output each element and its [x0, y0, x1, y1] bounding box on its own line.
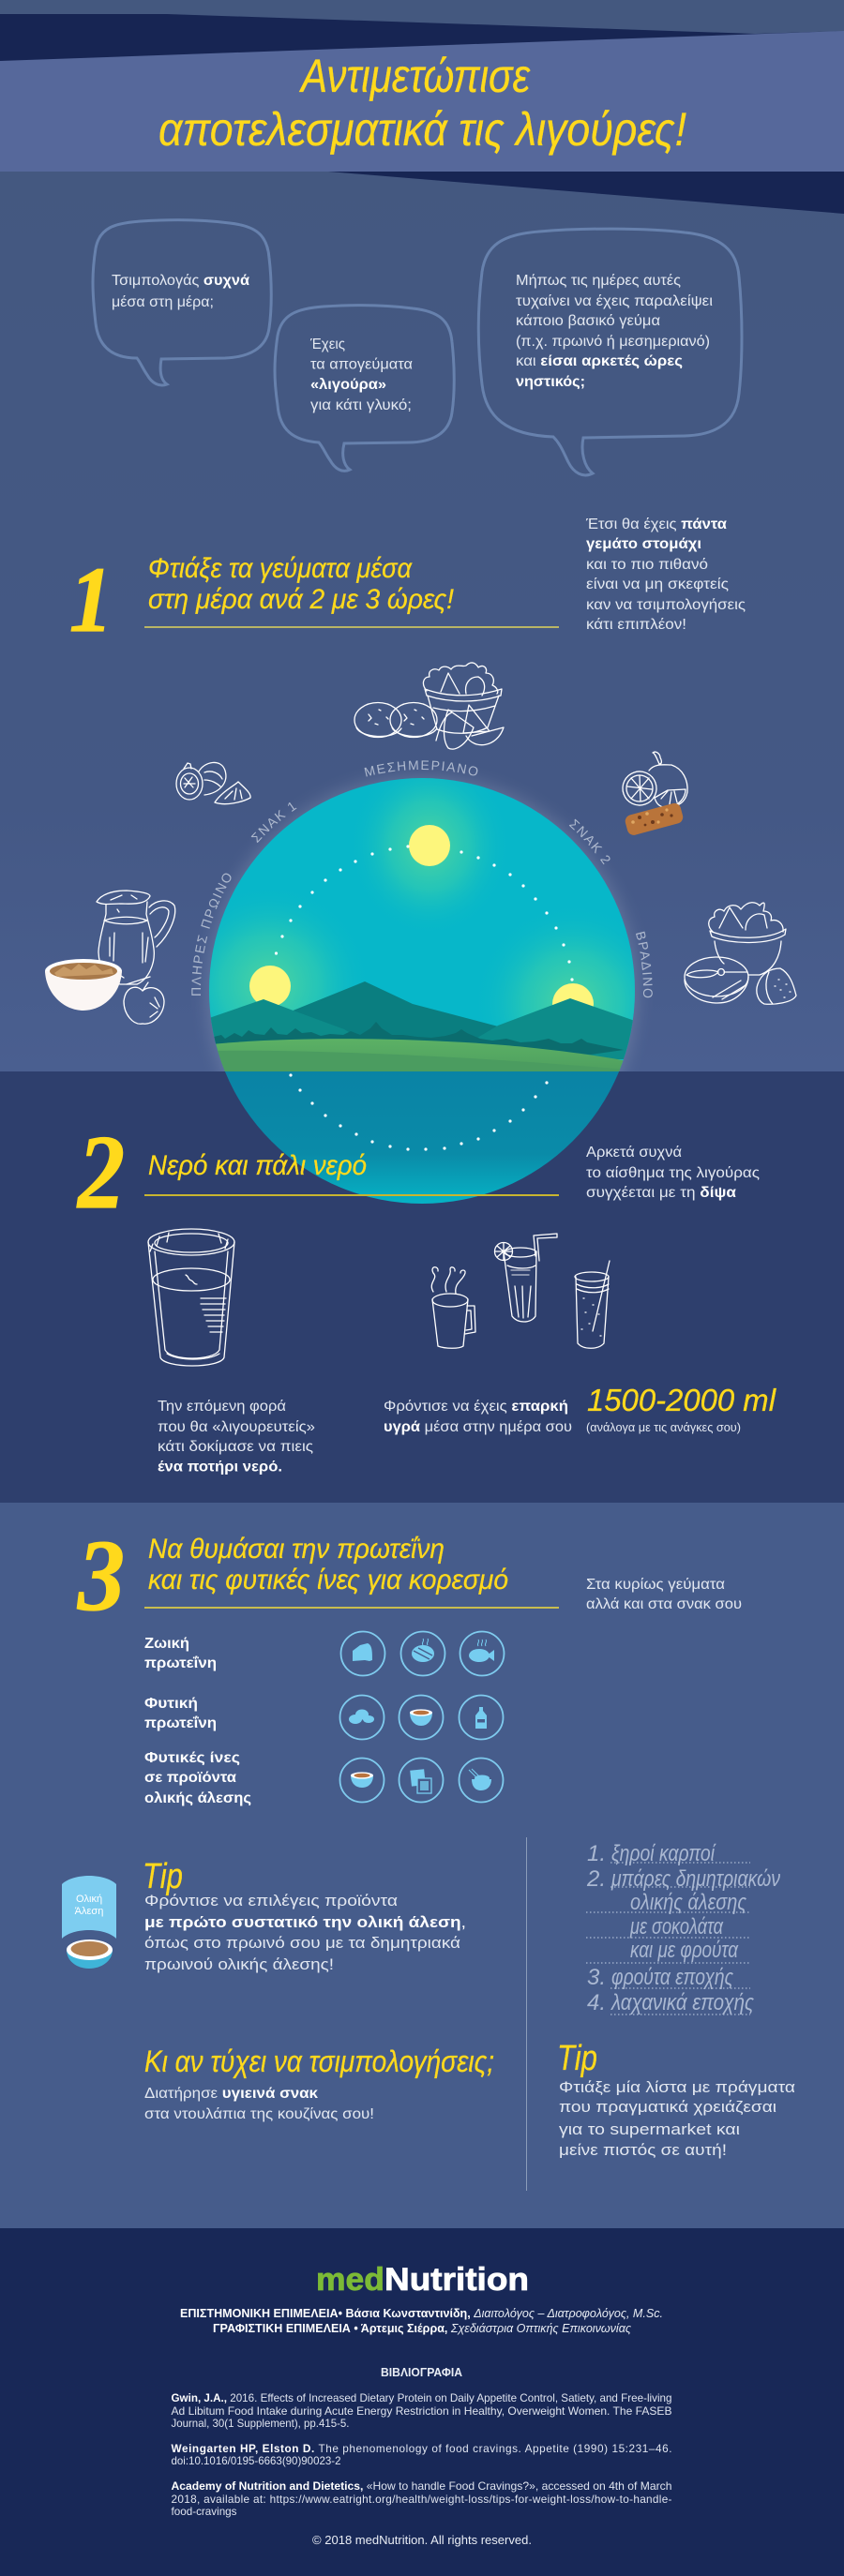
- sun: morning: [249, 966, 291, 1007]
- step 2 side text: το αίσθημα της λιγούρας: [586, 1165, 760, 1181]
- icon: breakfast jug: [97, 891, 175, 984]
- text: enough fluids: υγρά μέσα στην ημέρα σου: [384, 1419, 572, 1435]
- references: food-cravings: [171, 2505, 237, 2518]
- divider: [526, 1837, 527, 2191]
- icon: lunch salad, patties, wedges: [354, 663, 504, 749]
- icon: dinner salad, tin, bread: [685, 903, 796, 1004]
- meal labels around circle: ΣΝΑΚ 2: [568, 819, 610, 864]
- text: if you snack: Διατήρησε υγιεινά σνακ: [144, 2086, 318, 2102]
- speech bubble: afternoon craving: Έχεις: [309, 337, 345, 352]
- references: Academy of Nutrition and Dietetics, «How to handle Food Cravings?», accessed on 4th of March: [171, 2479, 671, 2493]
- icon: fish: [469, 1640, 494, 1662]
- step 2 side text: συγχέεται με τη δίψα: [586, 1185, 737, 1201]
- step 1 heading: Φτιάξε τα γεύματα μέσα: [148, 553, 413, 584]
- text: next time drink water: Την επόμενη φορά: [158, 1399, 286, 1415]
- text: if you snack: στα ντουλάπια της κουζίνας σου!: [144, 2106, 374, 2122]
- callout: 1500-2000 ml: 1500-2000 ml: [587, 1383, 777, 1417]
- speech bubble: skipped meal: Μήπως τις ημέρες αυτές: [516, 273, 681, 289]
- credits: [180, 2306, 663, 2335]
- step 1 side text: [585, 517, 746, 633]
- shopping list: 3.: [587, 1965, 606, 1990]
- sun: evening: [552, 983, 594, 1007]
- step 1 heading: [69, 547, 559, 651]
- step 2 side text: Αρκετά συχνά: [586, 1145, 682, 1161]
- speech bubble: snacking often: μέσα στη μέρα;: [112, 294, 214, 310]
- icon: figs and dates (snack 1): [176, 762, 250, 804]
- text: enough fluids: Φρόντισε να έχεις επαρκή: [384, 1399, 568, 1415]
- text: if you snack: Κι αν τύχει να τσιμπολογήσεις;: [144, 2044, 494, 2078]
- tip: shopping list: Tip: [557, 2039, 597, 2078]
- logo: medNutrition: [316, 2262, 529, 2298]
- shopping list: 4.: [587, 1990, 606, 2015]
- row: whole grain fibre: σε προϊόντα: [144, 1770, 236, 1786]
- tip: shopping list: Φτιάξε μία λίστα με πράγματα: [559, 2078, 795, 2096]
- callout: 1500-2000 ml: (ανάλογα με τις ανάγκες σου): [586, 1421, 741, 1434]
- step 1 side text: είναι να μη σκεφτείς: [586, 577, 729, 592]
- step 3 heading: Να θυμάσαι την πρωτεΐνη: [148, 1534, 445, 1565]
- step 3 heading: και τις φυτικές ίνες για κορεσμό: [148, 1565, 508, 1595]
- row: plant protein: πρωτεΐνη: [144, 1715, 217, 1731]
- references: Ad Libitum Food Intake during Acute Energy Restriction in Healthy, Overweight Women. The FASEB: [171, 2404, 672, 2418]
- tip: whole grain: πρωινού ολικής άλεσης!: [144, 1955, 334, 1973]
- text: next time drink water: κάτι δοκίμασε να πιεις: [158, 1439, 313, 1455]
- tree line: [214, 1022, 624, 1055]
- icon: glass of water: [148, 1229, 234, 1366]
- row: animal protein: πρωτεΐνη: [144, 1655, 217, 1671]
- text: next time drink water: που θα «λιγουρευτείς»: [158, 1419, 315, 1435]
- row: whole grain fibre: Φυτικές ίνες: [144, 1750, 240, 1766]
- speech bubble: skipped meal: [478, 229, 742, 475]
- copyright: © 2018 medNutrition. All rights reserved.: [312, 2533, 532, 2547]
- shopping list: μπάρες δημητριακών: [610, 1866, 780, 1892]
- shopping list: και με φρούτα: [630, 1938, 739, 1963]
- icon: bottle: [475, 1707, 487, 1729]
- references: [171, 2366, 672, 2518]
- tip: whole grain: Φρόντισε να επιλέγεις προϊόντα: [144, 1892, 398, 1910]
- step 1 side text: γεμάτο στομάχι: [586, 536, 701, 552]
- meal labels around circle: ΒΡΑΔΙΝΟ: [636, 932, 653, 997]
- step 1 heading: 1: [69, 547, 113, 651]
- meal labels around circle: [191, 760, 653, 997]
- step 2 heading: Νερό και πάλι νερό: [148, 1150, 367, 1181]
- shopping list: λαχανικά εποχής: [610, 1990, 754, 2015]
- icon: citrus (snack 2): [618, 752, 687, 810]
- step 1 side text: κάτι επιπλέον!: [586, 617, 686, 633]
- halo around day circle: [203, 771, 641, 1071]
- icon: apple: [124, 982, 164, 1024]
- shopping list: με σοκολάτα: [629, 1914, 724, 1939]
- icon: blue cereal bowl: [67, 1939, 113, 1969]
- icon: cheese: [353, 1643, 372, 1661]
- references: Gwin, J.A., 2016. Effects of Increased Dietary Protein on Daily Appetite Control, Satiety, and Free-living: [171, 2391, 671, 2404]
- background: footer: [0, 2228, 844, 2576]
- speech bubble: afternoon craving: [275, 306, 454, 471]
- step 1 side text: καν να τσιμπολογήσεις: [586, 597, 746, 613]
- icon: crackers: [410, 1769, 431, 1793]
- sun: noon: [409, 825, 450, 866]
- row: animal protein: [144, 1631, 505, 1676]
- credits: ΓΡΑΦΙΣΤΙΚΗ ΕΠΙΜΕΛΕΙΑ • Άρτεμις Σιέρρα, Σχεδιάστρια Οπτικής Επικοινωνίας: [213, 2321, 632, 2335]
- title banner: [0, 14, 844, 214]
- step 2 side text: [586, 1145, 760, 1201]
- mountains: [209, 981, 638, 1059]
- step 3 side text: αλλά και στα σνακ σου: [586, 1596, 742, 1612]
- step 1 heading: στη μέρα ανά 2 με 3 ώρες!: [148, 584, 455, 615]
- step 1 side text: και το πιο πιθανό: [586, 557, 708, 573]
- speech bubble: snacking often: Τσιμπολογάς συχνά: [112, 273, 249, 289]
- shopping list: 2.: [586, 1866, 606, 1892]
- tip: whole grain: [143, 1857, 466, 1973]
- icon: tall drink with lemon: [495, 1234, 557, 1322]
- meal labels around circle: ΠΛΗΡΕΣ ΠΡΩΙΝΟ: [191, 874, 231, 996]
- logo: medNutrition: med: [316, 2262, 384, 2298]
- icon: steaming mug: [431, 1267, 475, 1348]
- tip: whole grain: όπως στο πρωινό σου με τα δημητριακά: [144, 1934, 460, 1952]
- green land: [211, 1039, 638, 1071]
- credits: ΕΠΙΣΤΗΜΟΝΙΚΗ ΕΠΙΜΕΛΕΙΑ• Βάσια Κωνσταντινίδη, Διαιτολόγος – Διατροφολόγος, M.Sc.: [180, 2306, 663, 2320]
- speech bubble: afternoon craving: «λιγούρα»: [310, 377, 386, 393]
- speech bubble: skipped meal: και είσαι αρκετές ώρες: [516, 353, 683, 369]
- text: next time drink water: ένα ποτήρι νερό.: [158, 1459, 282, 1475]
- step 3 heading: 3: [77, 1520, 125, 1632]
- icon: iced glass with straw: [575, 1261, 610, 1348]
- shopping list: φρούτα εποχής: [611, 1965, 733, 1990]
- meal labels around circle: ΣΝΑΚ 1: [251, 802, 296, 843]
- step 1 side text: Έτσι θα έχεις πάντα: [585, 517, 727, 532]
- references: Journal, 30(1 Supplement), pp.415-5.: [171, 2417, 349, 2430]
- logo: medNutrition: Nutrition: [384, 2262, 529, 2298]
- icon: cereal bar (snack 2): [624, 801, 685, 836]
- ribbon: whole grain: [62, 1876, 116, 1969]
- row: whole grain fibre: ολικής άλεσης: [144, 1790, 251, 1806]
- tip: whole grain: με πρώτο συστατικό την ολική άλεση ,: [144, 1913, 466, 1931]
- icon: rice bowl with chopsticks: [469, 1769, 491, 1790]
- references: 2018, available at: https://www.eatright.org/health/weight-loss/tips-for-weight-loss/how-to-handle-: [171, 2493, 672, 2506]
- references: ΒΙΒΛΙΟΓΡΑΦΙΑ: [381, 2366, 462, 2379]
- step 2 heading: 2: [76, 1115, 125, 1231]
- step 3 side text: [586, 1577, 742, 1612]
- background: section 3: [0, 1503, 844, 2228]
- sun path dots: [275, 845, 574, 1151]
- row: whole grain fibre: [144, 1750, 503, 1806]
- speech bubble: afternoon craving: τα απογεύματα: [310, 356, 413, 373]
- icon: steak: [412, 1639, 434, 1662]
- tip: shopping list: για το supermarket και: [559, 2120, 740, 2138]
- speech bubble: skipped meal: κάποιο βασικό γεύμα: [516, 313, 660, 329]
- step 3 side text: Στα κυρίως γεύματα: [586, 1577, 725, 1593]
- shopping list: [586, 1841, 780, 2015]
- callout: 1500-2000 ml: [586, 1383, 777, 1434]
- title: [158, 50, 686, 156]
- day circle landscape: [209, 778, 635, 1204]
- icon: beans: [349, 1710, 374, 1724]
- tip: shopping list: που πραγματικά χρειάζεσαι: [559, 2098, 776, 2116]
- speech bubble: snacking often: [93, 220, 271, 385]
- row: plant protein: [144, 1695, 503, 1740]
- shopping list: ξηροί καρποί: [611, 1841, 716, 1866]
- speech bubble: skipped meal: νηστικός;: [516, 374, 585, 390]
- background: section 2: [0, 1071, 844, 1503]
- icon: cereal bowl: [351, 1772, 373, 1788]
- background: upper section: [0, 0, 844, 1071]
- step 3 heading: [77, 1520, 559, 1632]
- meal labels around circle: ΜΕΣΗΜΕΡΙΑΝΟ: [364, 760, 478, 776]
- references: Weingarten HP, Elston D. The phenomenology of food cravings. Appetite (1990) 15:231–46.: [171, 2442, 671, 2455]
- shopping list: 1.: [587, 1841, 606, 1866]
- icon: bowl: [410, 1709, 432, 1726]
- text: next time drink water: [158, 1399, 315, 1475]
- tip: shopping list: [557, 2039, 795, 2159]
- speech bubble: skipped meal: τυχαίνει να έχεις παραλείψει: [516, 293, 713, 309]
- shopping list: ολικής άλεσης: [630, 1890, 746, 1915]
- tip: shopping list: μείνε πιστός σε αυτή!: [559, 2141, 727, 2159]
- text: if you snack: [144, 2044, 494, 2122]
- icon: cereal bowl: [45, 959, 122, 1011]
- title: Αντιμετώπισε: [298, 50, 531, 102]
- ribbon: whole grain: Άλεση: [75, 1906, 103, 1917]
- ribbon: whole grain: Ολική: [76, 1894, 102, 1905]
- step 2 heading: [76, 1115, 559, 1231]
- row: plant protein: Φυτική: [144, 1696, 198, 1712]
- text: enough fluids: [384, 1399, 572, 1435]
- speech bubble: skipped meal: (π.χ. πρωινό ή μεσημεριανό): [516, 334, 710, 350]
- tip: whole grain: Tip: [143, 1857, 183, 1896]
- row: animal protein: Ζωική: [144, 1636, 189, 1652]
- references: doi:10.1016/0195-6663(90)90023-2: [171, 2454, 341, 2467]
- title: αποτελεσματικά τις λιγούρες!: [158, 103, 686, 156]
- speech bubble: afternoon craving: για κάτι γλυκό;: [310, 397, 412, 413]
